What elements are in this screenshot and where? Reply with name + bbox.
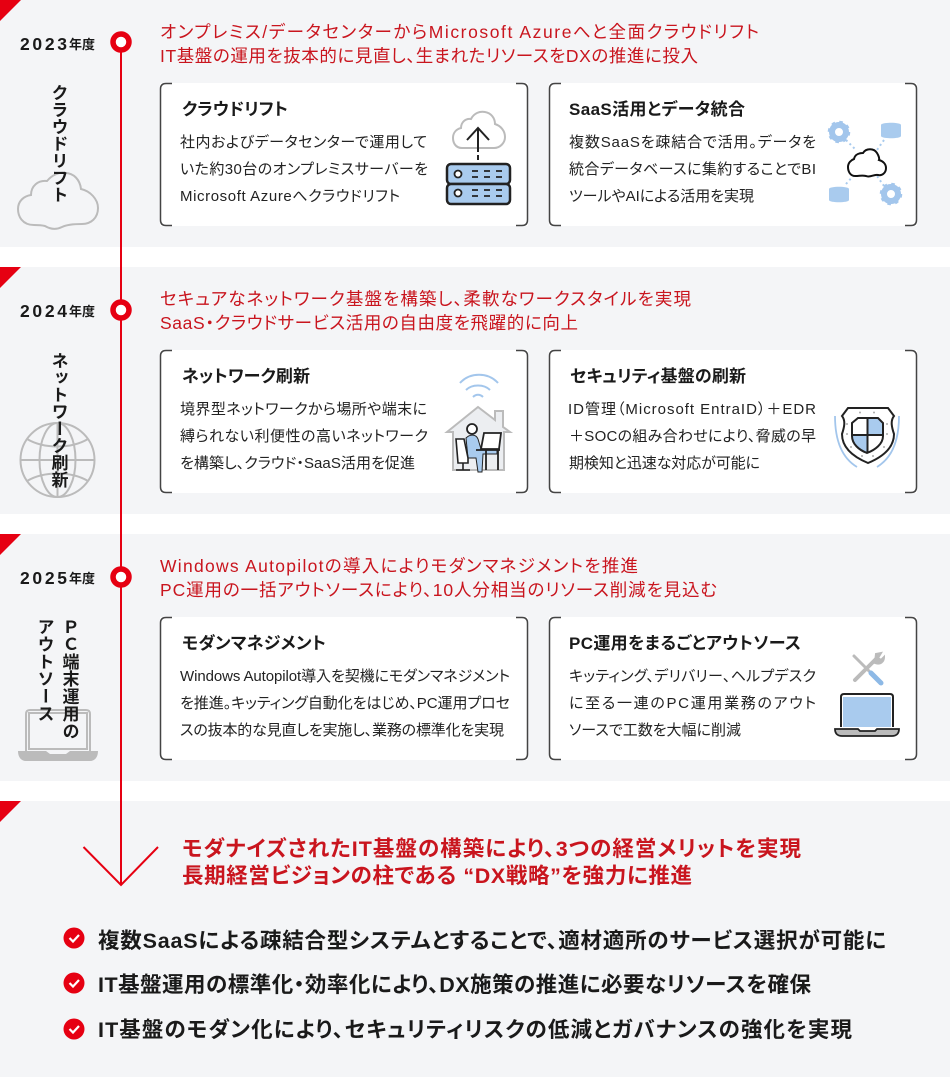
timeline arrow [84, 34, 158, 885]
icon: grey cloud [18, 173, 98, 229]
card: モダンマネジメント: Windows Autopilot導入を契機にモダンマネジメント [180, 668, 510, 685]
card: クラウドリフト: 社内およびデータセンターで運用して [180, 133, 427, 151]
lead text [160, 22, 759, 66]
conclusion heading [182, 836, 801, 888]
panel: 2023 cloud lift [0, 0, 950, 247]
vertical heading: ネットワーク刷新 [48, 352, 68, 488]
icon: grey globe [20, 423, 94, 497]
card: PC運用をまるごとアウトソース [549, 617, 917, 760]
panel: conclusion [0, 801, 950, 1077]
card: モダンマネジメント: スの抜本的な見直しを実施し、業務の標準化を実現 [180, 722, 504, 739]
conclusion heading: モダナイズされたIT基盤の構築により、3つの経営メリットを実現 [182, 836, 801, 861]
card: ネットワーク刷新: を構築し、クラウド・SaaS活用を促進 [180, 454, 415, 472]
year label 2023: 2023 [20, 34, 67, 54]
benefit 2: IT基盤運用の標準化・効率化により、DX施策の推進に必要なリソースを確保 [98, 973, 811, 997]
card: モダンマネジメント [160, 617, 528, 760]
lead text: PC運用の一括アウトソースにより、10人分相当のリソース削減を見込む [160, 580, 717, 600]
benefit 1: 複数SaaSによる疎結合型システムとすることで、適材適所のサービス選択が可能に [98, 928, 886, 953]
timeline node 2024 [113, 302, 129, 318]
card: ネットワーク刷新: 縛られない利便性の高いネットワーク [180, 428, 428, 445]
card: セキュリティ基盤の刷新: 期検知と迅速な対応が可能に [569, 455, 760, 472]
card: ネットワーク刷新: ネットワーク刷新 [182, 367, 310, 386]
year label 2024 [20, 301, 95, 321]
card: SaaS活用とデータ統合: 統合データベースに集約することでBI [569, 160, 816, 178]
card: SaaS活用とデータ統合: 複数SaaSを疎結合で活用。データを [569, 133, 816, 151]
year label 2025: 2025 [20, 568, 67, 588]
year label 2025: 年度 [69, 571, 95, 586]
card: クラウドリフト [160, 83, 528, 226]
panel: 2024 network [0, 267, 950, 514]
year label 2023: 年度 [69, 37, 95, 52]
card: PC運用をまるごとアウトソース: PC運用をまるごとアウトソース [569, 633, 801, 653]
card: PC運用をまるごとアウトソース: ソースで工数を大幅に削減 [569, 722, 741, 739]
icon: cloud data integration [829, 122, 901, 204]
vertical heading: ＰＣ端末運用の [60, 618, 79, 740]
card: モダンマネジメント: モダンマネジメント [182, 633, 326, 653]
card: セキュリティ基盤の刷新: ID管理（Microsoft EntraID）＋EDR [568, 400, 816, 418]
card: モダンマネジメント: を推進。キッティング自動化をはじめ、PC運用プロセ [180, 695, 510, 712]
lead text: IT基盤の運用を抜本的に見直し、生まれたリソースをDXの推進に投入 [160, 46, 698, 66]
timeline node 2025 [113, 569, 129, 585]
icon: cloud upload server [447, 112, 510, 204]
icon: grey laptop [18, 710, 98, 761]
card: セキュリティ基盤の刷新: ＋SOCの組み合わせにより、脅威の早 [569, 428, 816, 445]
card: セキュリティ基盤の刷新 [549, 350, 917, 493]
card: PC運用をまるごとアウトソース: キッティング、デリバリー、ヘルプデスク [569, 667, 816, 685]
vertical heading [34, 618, 79, 740]
card: クラウドリフト: いた約30台のオンプレミスサーバーを [180, 161, 428, 178]
card: クラウドリフト: Microsoft Azureへクラウドリフト [180, 188, 400, 205]
year label 2024: 2024 [20, 301, 67, 321]
vertical heading: アウトソース [34, 618, 54, 722]
year label 2023 [20, 34, 95, 54]
timeline node 2023 [113, 34, 129, 50]
benefit 3: IT基盤のモダン化により、セキュリティリスクの低減とガバナンスの強化を実現 [98, 1017, 852, 1042]
conclusion heading: 長期経営ビジョンの柱である “DX戦略”を強力に推進 [182, 864, 692, 888]
icon: tools and laptop [835, 653, 899, 736]
year label 2025 [20, 568, 95, 588]
lead text: SaaS・クラウドサービス活用の自由度を飛躍的に向上 [160, 313, 578, 333]
card: ネットワーク刷新 [160, 350, 528, 493]
card: SaaS活用とデータ統合: SaaS活用とデータ統合 [569, 99, 745, 119]
panel: 2025 PC management [0, 534, 950, 781]
card: PC運用をまるごとアウトソース: に至る一連のPC運用業務のアウト [569, 695, 816, 712]
year label 2024: 年度 [69, 304, 95, 319]
icon: remote work house with wifi [447, 375, 510, 472]
icon: shield [835, 408, 899, 467]
card: ネットワーク刷新: 境界型ネットワークから場所や端末に [180, 401, 427, 418]
card: セキュリティ基盤の刷新: セキュリティ基盤の刷新 [570, 367, 746, 386]
card: クラウドリフト: クラウドリフト [182, 100, 288, 119]
lead text [160, 556, 717, 600]
lead text: Windows Autopilotの導入によりモダンマネジメントを推進 [160, 556, 638, 576]
lead text: セキュアなネットワーク基盤を構築し、柔軟なワークスタイルを実現 [160, 289, 692, 309]
lead text [160, 289, 692, 333]
card: SaaS活用とデータ統合: ツールやAIによる活用を実現 [569, 188, 754, 205]
card: SaaS活用とデータ統合 [549, 83, 917, 226]
lead text: オンプレミス/データセンターからMicrosoft Azureへと全面クラウドリフト [160, 22, 759, 42]
vertical heading: クラウドリフト [48, 84, 68, 203]
